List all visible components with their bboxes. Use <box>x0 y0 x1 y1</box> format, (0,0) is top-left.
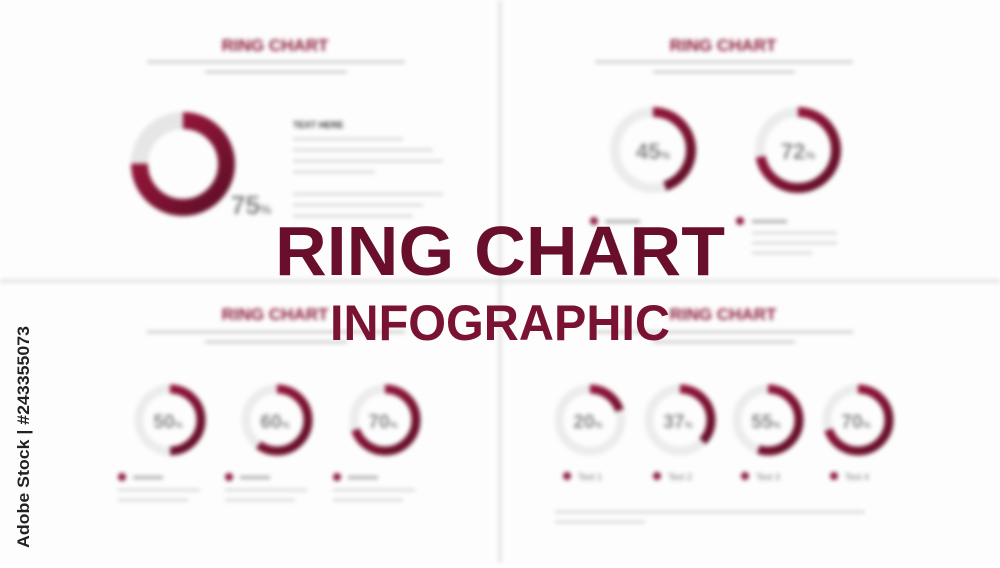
panel: top-left: 75% <box>231 190 272 220</box>
panel: bottom-right: RING CHART <box>670 305 777 324</box>
panel: bottom-right: Text 3 <box>756 472 780 482</box>
panel: top-right: RING CHART <box>670 36 777 55</box>
panel: bottom-right: 70% <box>841 412 871 433</box>
panel: bottom-left: 50% <box>153 412 183 433</box>
panel: top-right <box>590 36 853 254</box>
panel: bottom-right: 55% <box>751 412 781 433</box>
panel: bottom-right: Text 4 <box>845 472 869 482</box>
panel: bottom-left: 60% <box>260 412 290 433</box>
panel: top-left: TEXT HERE <box>293 120 344 130</box>
panel: top-right: 45% <box>636 139 670 164</box>
panel: top-right: 72% <box>781 139 815 164</box>
panel: top-left: RING CHART <box>222 36 329 55</box>
panel: bottom-right: Text 2 <box>668 472 692 482</box>
panel: bottom-left: 70% <box>368 412 398 433</box>
title: RING CHART: RING CHART <box>275 212 725 290</box>
subtitle: INFOGRAPHIC: INFOGRAPHIC <box>330 295 670 351</box>
panel: top-left <box>140 36 443 220</box>
panel: bottom-left: RING CHART <box>222 305 329 324</box>
panel: bottom-right: Text 1 <box>578 472 602 482</box>
panel: bottom-right: 37% <box>663 412 693 433</box>
panel: bottom-left <box>118 305 416 501</box>
watermark id vertical: Adobe Stock | #243355073 <box>14 326 33 548</box>
panel: bottom-right: 20% <box>573 412 603 433</box>
panel: bottom-right <box>555 305 889 523</box>
